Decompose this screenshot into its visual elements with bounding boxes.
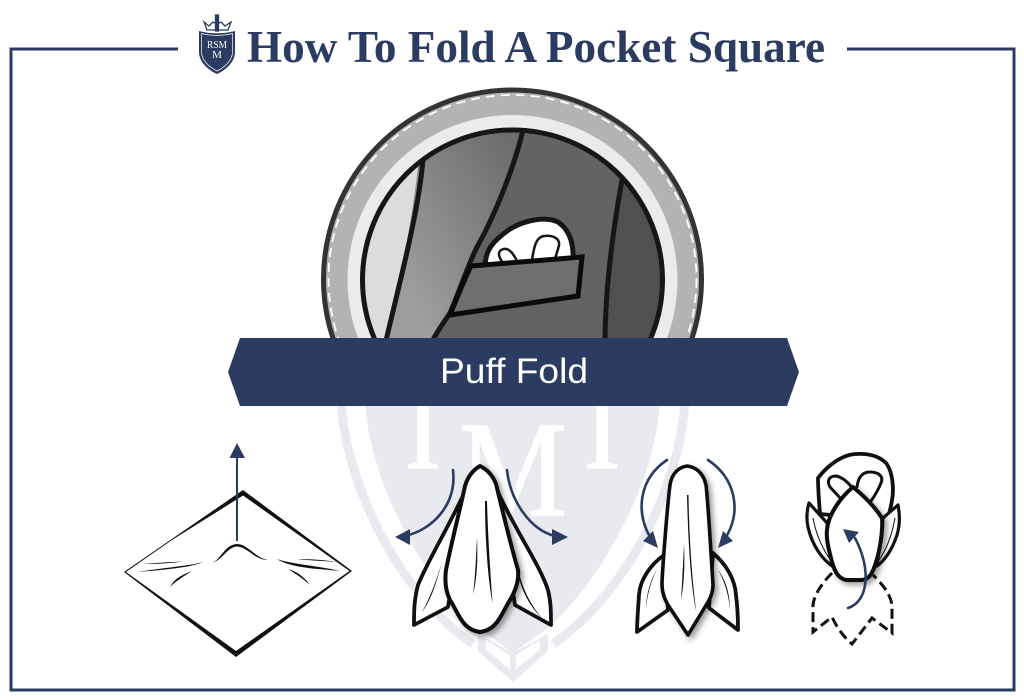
watermark shield: [341, 363, 685, 682]
centre panel: [445, 466, 518, 632]
banner: Puff Fold: [440, 352, 588, 391]
back puff: [818, 454, 893, 520]
title: How To Fold A Pocket Square: [247, 22, 825, 72]
watermark letters: I: [584, 363, 620, 494]
arrow left: [395, 470, 453, 545]
watermark letters: [405, 363, 620, 545]
shield: [199, 31, 235, 74]
right flap: [709, 553, 738, 630]
jacket: [365, 132, 660, 338]
dashed original outline: [813, 573, 892, 644]
medallion circle outline: [360, 128, 665, 338]
pocket square in pocket: [485, 219, 573, 268]
logo crest: [199, 15, 235, 74]
arrow right: [507, 470, 568, 545]
flap wrinkles: [422, 554, 542, 618]
wrinkles: [138, 544, 340, 587]
logo crest: M: [212, 49, 222, 61]
left flap: [807, 503, 835, 568]
flap wrinkles: [646, 568, 730, 610]
step 1: flat square: [124, 443, 352, 657]
arrow up into pocket: [843, 529, 866, 608]
step 4: bottom folded up: [807, 454, 899, 644]
arrow right: [708, 460, 734, 548]
medallion rings: [321, 88, 704, 338]
right flap: [497, 490, 551, 625]
centre wrinkles: [681, 495, 696, 612]
pocket welt: [450, 257, 582, 315]
centre panel: [662, 466, 713, 635]
step 3: sides folded in: [637, 460, 738, 635]
step 2: side flaps out: [395, 466, 568, 632]
watermark letters: I: [405, 363, 441, 494]
centre wrinkles: [473, 501, 492, 603]
left flap: [637, 555, 668, 632]
front panel: [827, 487, 882, 580]
arrow up: [230, 443, 245, 541]
diamond: [124, 490, 352, 657]
watermark letters: M: [459, 395, 567, 545]
puff loops: [828, 476, 854, 500]
right flap: [877, 505, 899, 566]
watermark chevron: [478, 634, 548, 682]
crown: [204, 15, 231, 31]
arrow left: [642, 460, 667, 548]
left flap: [414, 485, 468, 625]
banner: [228, 338, 799, 406]
jacket pocket medallion: [321, 88, 704, 338]
logo crest: RSM: [207, 40, 227, 51]
